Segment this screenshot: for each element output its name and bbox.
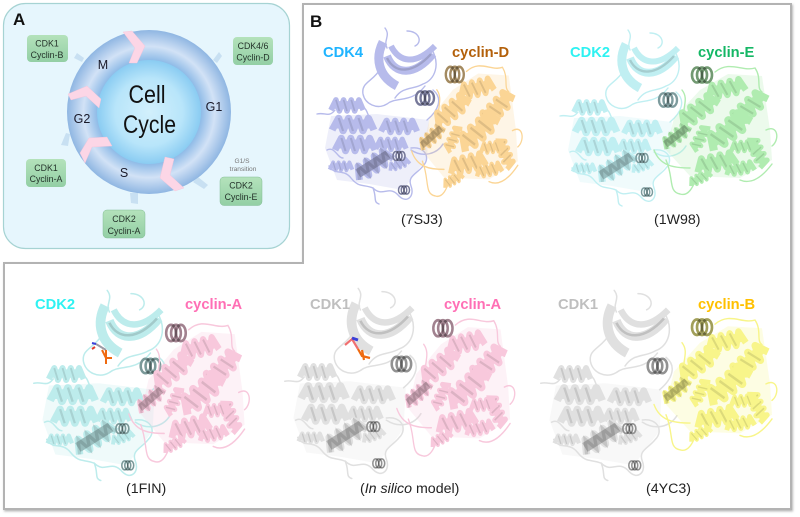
- box: CDK4/6 Cyclin-D: CDK4/6: [238, 41, 269, 51]
- core: [97, 60, 201, 164]
- title: Cell Cycle: Cell: [128, 81, 166, 109]
- box: CDK2 Cyclin-A: CDK2: [112, 214, 136, 224]
- box: CDK2 Cyclin-A: [103, 210, 145, 238]
- label: CDK4: CDK4: [323, 45, 364, 61]
- ribbon: CDK1: [541, 290, 677, 480]
- structure: In silico model: [285, 288, 515, 497]
- box: CDK2 Cyclin-A: Cyclin-A: [108, 226, 141, 236]
- pink phase arrows: [68, 31, 184, 191]
- caption: 4YC3: (4YC3): [646, 481, 691, 497]
- phase labels: G1: [206, 100, 222, 114]
- box: CDK1 Cyclin-A: Cyclin-A: [30, 174, 63, 184]
- box: CDK4/6 Cyclin-D: Cyclin-D: [236, 52, 270, 62]
- title: Cell Cycle: [123, 81, 176, 139]
- ribbon: cyclin-A: [397, 319, 515, 456]
- box: CDK2 Cyclin-E: CDK2: [229, 180, 253, 190]
- box: CDK1 Cyclin-A: [26, 159, 66, 187]
- label: cyclin-A: cyclin-A: [185, 297, 243, 313]
- structure: 7SJ3: [317, 28, 522, 228]
- ribbon: cyclin-A: [129, 324, 249, 462]
- caption: 7SJ3: (7SJ3): [401, 212, 443, 228]
- label: G1/S transition: transition: [230, 166, 257, 173]
- cyclin tick marks: [61, 52, 222, 204]
- structure: 1FIN: [34, 290, 249, 497]
- label: cyclin-E: cyclin-E: [698, 45, 755, 61]
- ligand: ATP: [345, 338, 370, 360]
- caption: 1FIN: (1FIN): [126, 481, 166, 497]
- box: CDK1 Cyclin-B: Cyclin-B: [31, 50, 64, 60]
- ribbon: cyclin-B: [654, 318, 777, 450]
- ribbon: CDK4: [317, 28, 443, 204]
- box: CDK4/6 Cyclin-D: [233, 37, 273, 65]
- label: CDK2: CDK2: [570, 45, 610, 61]
- panel A: cell cycle: [4, 4, 290, 248]
- box: CDK1 Cyclin-A: CDK1: [34, 163, 58, 173]
- box: CDK1 Cyclin-B: [27, 35, 68, 62]
- caption: 1W98: (1W98): [654, 212, 701, 228]
- label: G1/S transition: [230, 158, 257, 173]
- phase labels: G2: [74, 112, 90, 126]
- box: CDK2 Cyclin-E: Cyclin-E: [225, 192, 258, 202]
- heading: B: B: [310, 12, 322, 31]
- ribbon: cyclin-E: [654, 67, 777, 194]
- ribbon: cyclin-D: [412, 66, 522, 196]
- box: CDK2 Cyclin-E: [220, 177, 262, 206]
- ribbon: CDK2: [560, 30, 686, 206]
- phase labels: M: [98, 58, 108, 72]
- ribbon: CDK1: [285, 288, 421, 478]
- label: CDK1: CDK1: [558, 297, 598, 313]
- heading: A: A: [13, 10, 25, 29]
- label: CDK1: CDK1: [310, 297, 350, 313]
- label: cyclin-B: cyclin-B: [698, 297, 755, 313]
- label: cyclin-D: cyclin-D: [452, 45, 509, 61]
- ribbon: CDK2: [34, 290, 170, 480]
- ligand: ATP: [92, 343, 112, 364]
- label: G1/S transition: G1/S: [234, 158, 250, 165]
- label: CDK2: CDK2: [35, 297, 75, 313]
- box: CDK1 Cyclin-B: CDK1: [35, 38, 59, 48]
- phase labels: S: [120, 166, 128, 180]
- ring: [67, 30, 231, 194]
- title: Cell Cycle: Cycle: [123, 111, 176, 139]
- phase labels: [74, 58, 222, 180]
- structure: 4YC3: [541, 290, 777, 497]
- caption: In silico model: (In silico model): [360, 481, 459, 497]
- structure: 1W98: [560, 30, 777, 228]
- label: cyclin-A: cyclin-A: [444, 297, 502, 313]
